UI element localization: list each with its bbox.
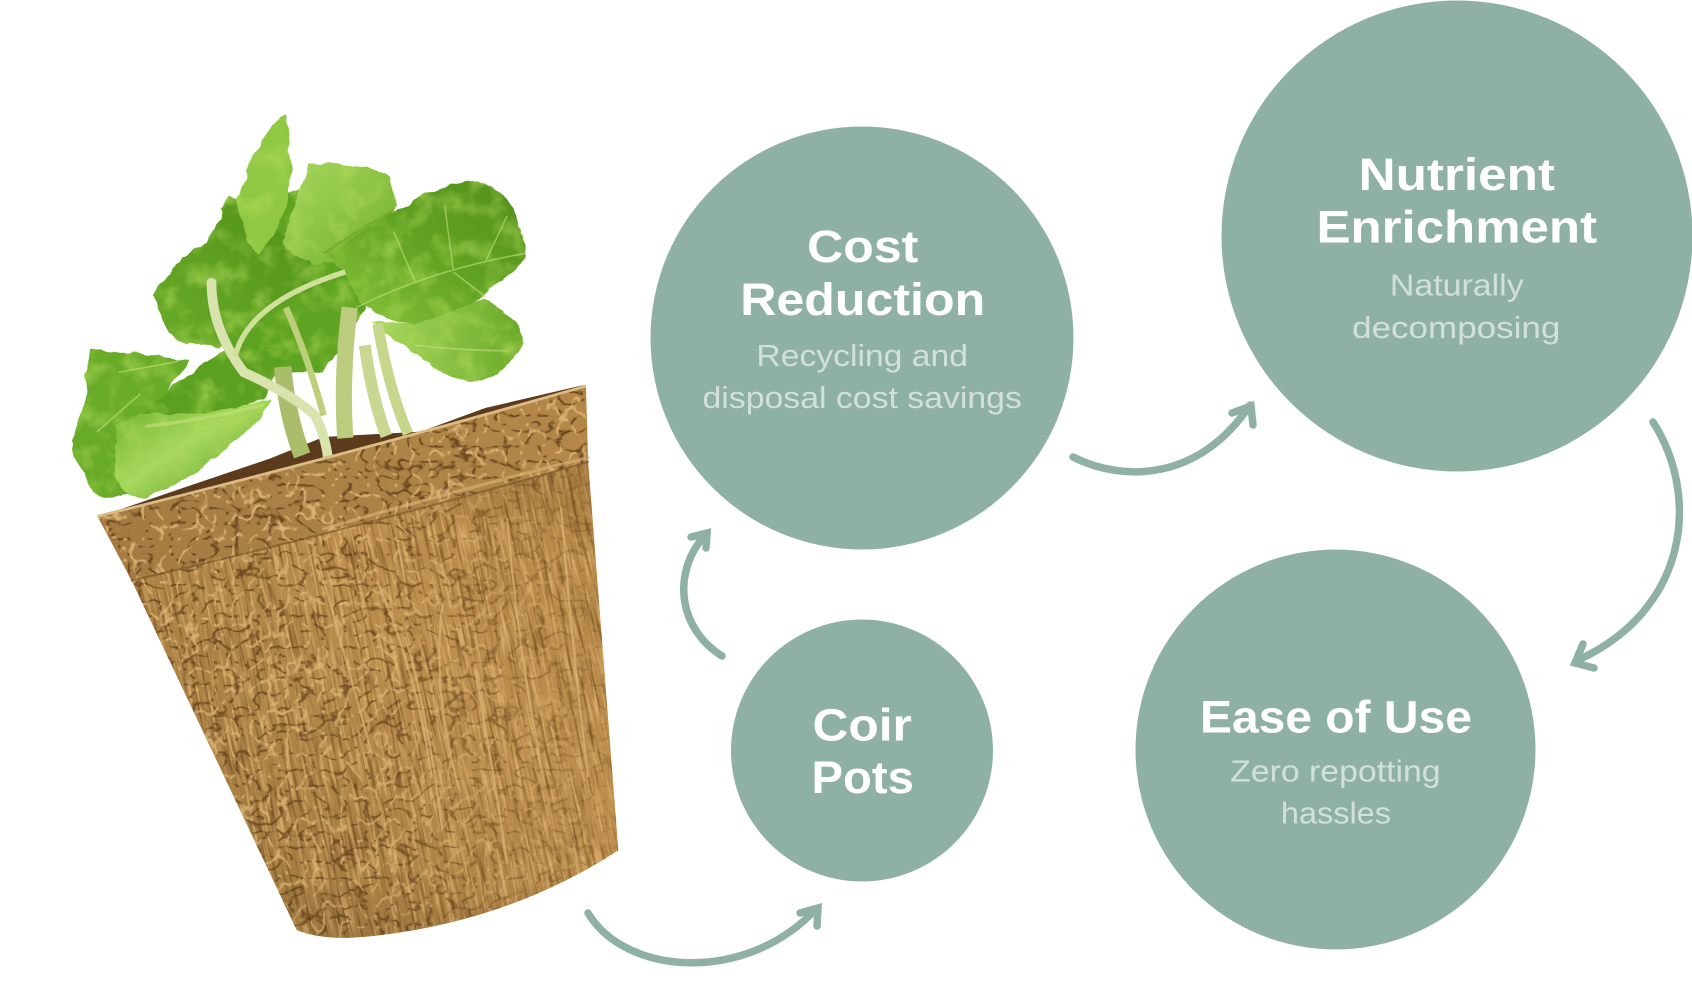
pot rim xyxy=(97,385,588,581)
leaves xyxy=(70,113,526,499)
heading: Coir Pots: Coir xyxy=(813,699,912,750)
heading: Ease of Use: Ease of Use xyxy=(1200,692,1472,743)
heading: Coir Pots xyxy=(811,699,914,803)
leaf veins xyxy=(97,205,524,432)
circle: Ease of Use xyxy=(1136,550,1536,950)
plant in coir pot photo xyxy=(72,114,618,938)
text: zero repotting hassles: Zero repotting xyxy=(1230,755,1441,788)
text: naturally decomposing: Naturally xyxy=(1390,270,1525,303)
arrow: Nutrient Enrichment to Ease of Use xyxy=(1575,422,1679,668)
heading: Nutrient Enrichment: Nutrient xyxy=(1359,149,1555,200)
arrow: Cost Reduction to Nutrient Enrichment xyxy=(1073,405,1253,472)
arrow: Coir Pots to Cost Reduction xyxy=(684,533,722,656)
text: zero repotting hassles: hassles xyxy=(1281,797,1391,830)
circle: Coir Pots xyxy=(731,620,993,882)
text: recycling and disposal savings: Recycling and xyxy=(756,340,968,373)
soil xyxy=(108,385,586,520)
text: recycling and disposal savings xyxy=(702,340,1022,415)
heading: Cost Reduction: Reduction xyxy=(740,274,985,325)
rim edges xyxy=(99,386,588,581)
text: naturally decomposing xyxy=(1352,270,1560,345)
circle: Cost Reduction xyxy=(650,126,1074,550)
stems xyxy=(212,272,408,460)
pot fibre texture xyxy=(132,462,618,938)
text: recycling and disposal savings: disposal cost savings xyxy=(702,382,1022,415)
rim fibre texture xyxy=(95,383,591,583)
heading: Cost Reduction: Cost xyxy=(807,221,918,272)
text: naturally decomposing: decomposing xyxy=(1352,312,1560,345)
pot body xyxy=(132,462,618,938)
text: zero repotting hassles xyxy=(1230,755,1441,830)
heading: Cost Reduction xyxy=(740,221,985,325)
heading: Nutrient Enrichment: Enrichment xyxy=(1317,201,1597,252)
arrow: pot to Coir Pots xyxy=(588,908,818,963)
heading: Nutrient Enrichment xyxy=(1317,149,1597,252)
circle: Nutrient Enrichment xyxy=(1222,0,1692,472)
heading: Coir Pots: Pots xyxy=(811,752,914,803)
